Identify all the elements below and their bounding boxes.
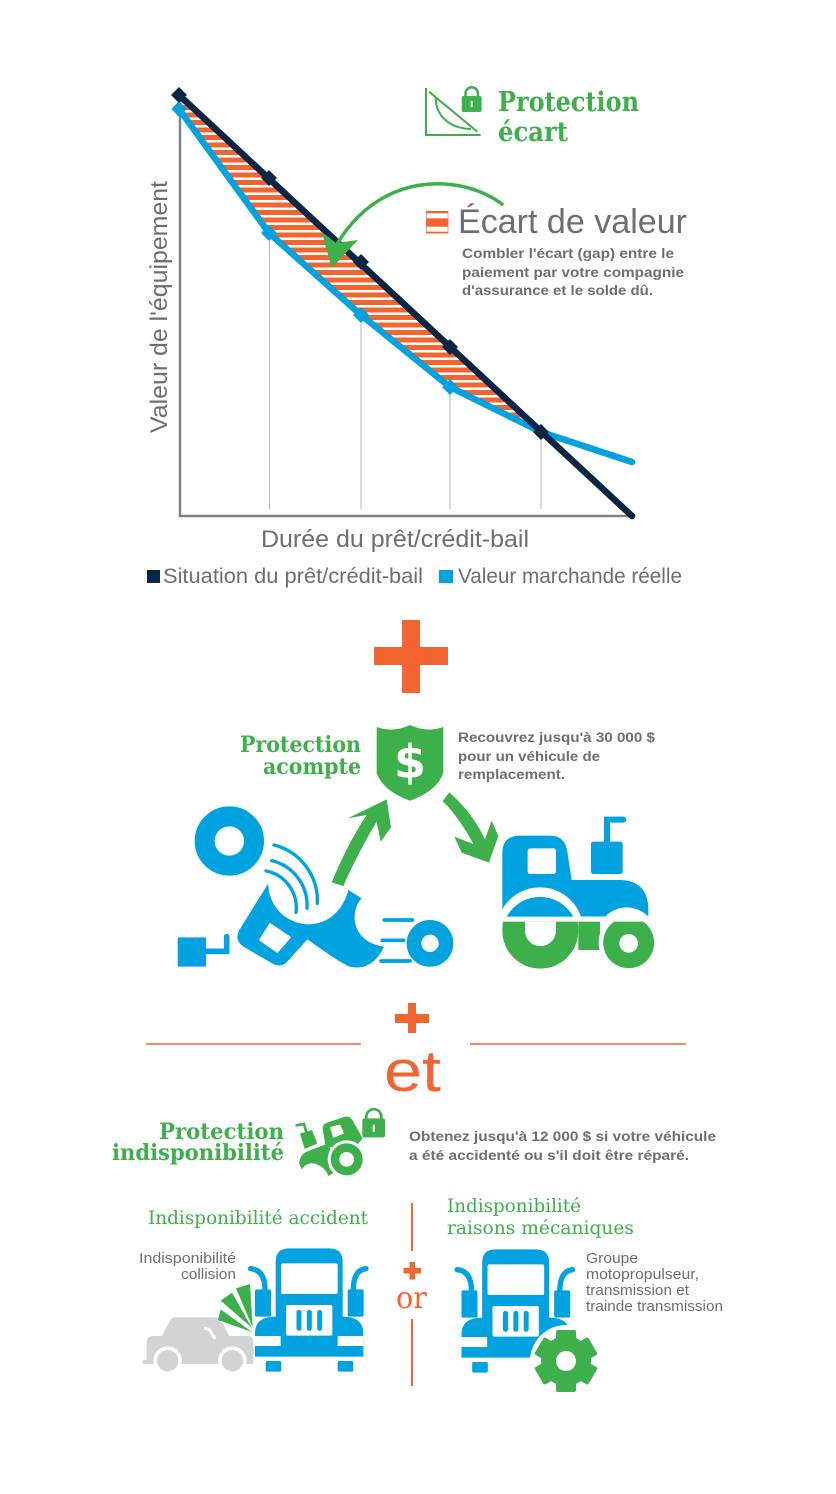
heading: protection ecart: écart <box>498 117 568 148</box>
heading: mechanical downtime <box>447 1195 634 1239</box>
text: powertrain coverage: Groupe <box>586 1250 638 1267</box>
heading: mechanical downtime: raisons mécaniques <box>447 1217 634 1239</box>
icon: impact burst <box>218 1284 253 1332</box>
icon: truck with gear <box>457 1249 602 1397</box>
heading: protection acompte <box>240 732 361 780</box>
divider with plus / or: or <box>396 1281 428 1316</box>
text: value gap description: d'assurance et le solde dû. <box>462 283 653 298</box>
heading: value gap: Écart de valeur <box>458 203 687 241</box>
text: powertrain coverage: transmission et <box>586 1282 690 1299</box>
text: indisponibilite description: Obtenez jusqu'à 12 000 $ si votre véhicule <box>409 1129 717 1144</box>
text: acompte description <box>458 730 656 782</box>
text: acompte description: pour un véhicule de <box>458 749 601 764</box>
icon: replacement tractor <box>497 820 659 974</box>
text: value gap description <box>462 246 685 298</box>
text: powertrain coverage: motopropulseur, <box>586 1266 699 1283</box>
heading: protection indisponibilite: indisponibilité <box>112 1140 284 1166</box>
text: powertrain coverage <box>586 1250 723 1315</box>
icon: truck front <box>251 1248 366 1372</box>
icon: small tractor with lock <box>297 1109 385 1178</box>
text: indisponibilite description: a été accidenté ou s'il doit être réparé. <box>409 1148 689 1163</box>
text: indisponibilite description <box>409 1129 717 1163</box>
icon: grey car <box>143 1317 253 1375</box>
legend <box>147 565 682 588</box>
small plus and rules above et <box>146 1003 686 1044</box>
text: collision: Indisponibilité <box>139 1250 236 1267</box>
divider with plus / or <box>396 1203 428 1386</box>
icon: gap protection triangle and lock <box>426 87 482 135</box>
icon: dollar shield <box>377 725 443 801</box>
arrow: shield to new tractor <box>443 792 498 863</box>
text: value gap description: Combler l'écart (gap) entre le <box>462 246 675 261</box>
text: value gap description: paiement par votre compagnie <box>462 265 685 280</box>
text: acompte description: Recouvrez jusqu'à 30 000 $ <box>458 730 656 745</box>
heading: protection indisponibilite <box>112 1119 284 1166</box>
x axis label: Durée du prêt/crédit-bail <box>261 526 529 553</box>
text: collision <box>139 1250 236 1283</box>
y axis label: Valeur de l'équipement <box>146 181 173 433</box>
heading: protection acompte: Protection <box>240 732 361 758</box>
icon: wrecked tractor <box>178 816 446 967</box>
heading: protection indisponibilite: Protection <box>159 1119 284 1145</box>
arrow: wrecked tractor to shield <box>332 799 391 886</box>
line chart: equipment value over loan term <box>171 87 632 516</box>
arrow: curved green pointer to gap <box>322 184 503 268</box>
heading: mechanical downtime: Indisponibilité <box>447 1195 581 1217</box>
text: collision: collision <box>181 1266 236 1283</box>
legend: Situation du prêt/crédit-bail <box>163 565 423 588</box>
market value line <box>172 101 632 462</box>
chart axes <box>180 110 632 516</box>
icon: dollar shield: $ <box>394 735 426 789</box>
icon: large plus <box>374 620 448 693</box>
heading: protection acompte: acompte <box>263 754 361 780</box>
text: acompte description: remplacement. <box>458 767 565 782</box>
loan status line <box>171 87 632 516</box>
heading: accident downtime: Indisponibilité accident <box>148 1207 368 1229</box>
legend icon: value gap swatch <box>426 211 448 234</box>
heading: protection ecart: Protection <box>498 87 639 118</box>
legend: Valeur marchande réelle <box>458 565 682 588</box>
heading: protection ecart <box>498 87 639 148</box>
value gap striped area <box>179 97 541 432</box>
vertical guide lines <box>270 233 541 509</box>
text: powertrain coverage: trainde transmission <box>586 1298 723 1315</box>
heading: et: et <box>384 1039 441 1104</box>
